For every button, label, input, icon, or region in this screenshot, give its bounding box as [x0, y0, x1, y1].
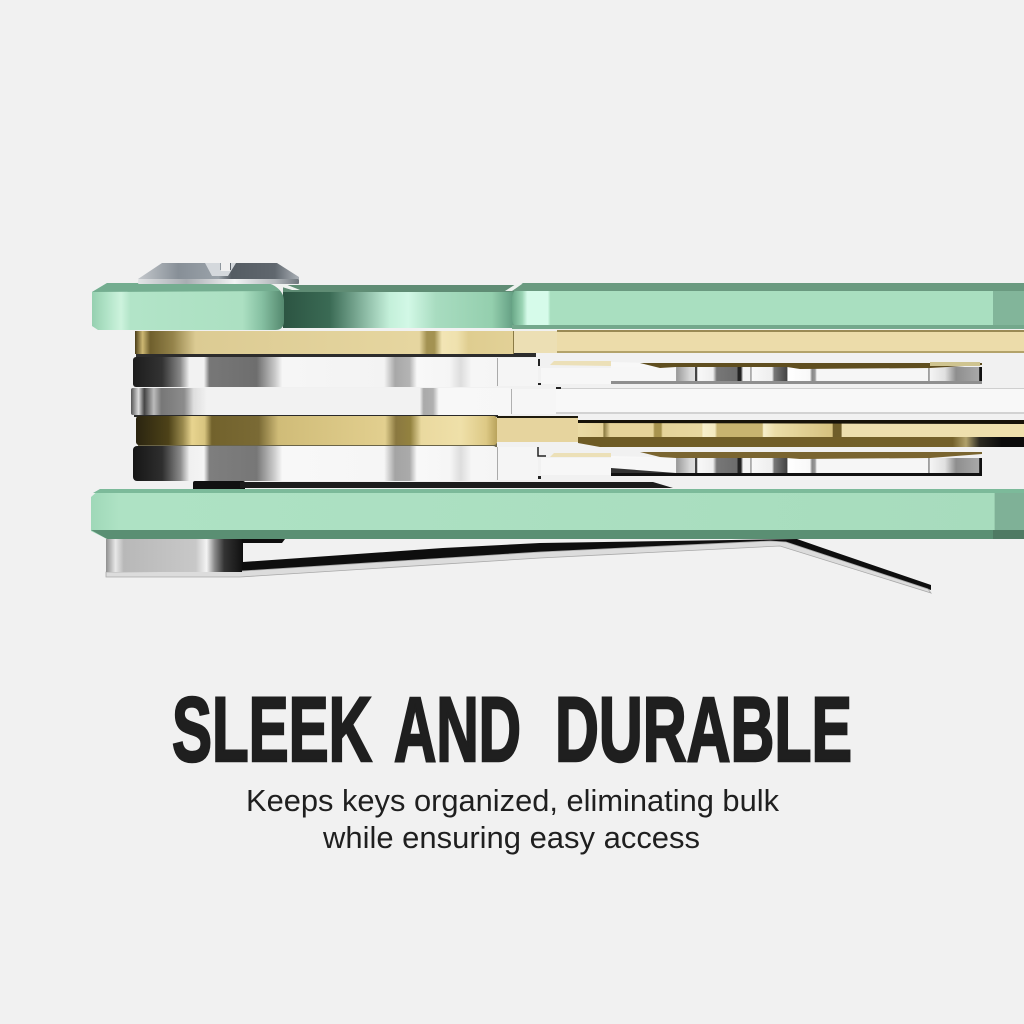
subtitle text: while ensuring easy access [322, 820, 700, 855]
top plate: middle section [283, 285, 515, 328]
silver key 2 [133, 357, 982, 387]
title [172, 679, 852, 781]
dark gaps between key heads [134, 353, 536, 447]
top plate: left section [92, 283, 300, 330]
subtitle text: Keeps keys organized, eliminating bulk [246, 783, 779, 818]
silver key 5 [133, 446, 982, 481]
silver key 3 [131, 387, 1024, 415]
spacer: black post and shim [193, 481, 673, 492]
bottom plate [91, 489, 1024, 539]
brass key 1: top layer [135, 330, 1024, 354]
title: DURABLE [555, 679, 852, 781]
title: AND [394, 679, 521, 781]
subtitle text [246, 783, 779, 855]
screw head [138, 263, 299, 284]
clip: pocket clip [106, 539, 931, 593]
product illustration: key organizer side view [91, 263, 1024, 593]
brass key 4 [136, 416, 1024, 447]
title: SLEEK [172, 679, 372, 781]
top plate: right section [505, 283, 1024, 329]
